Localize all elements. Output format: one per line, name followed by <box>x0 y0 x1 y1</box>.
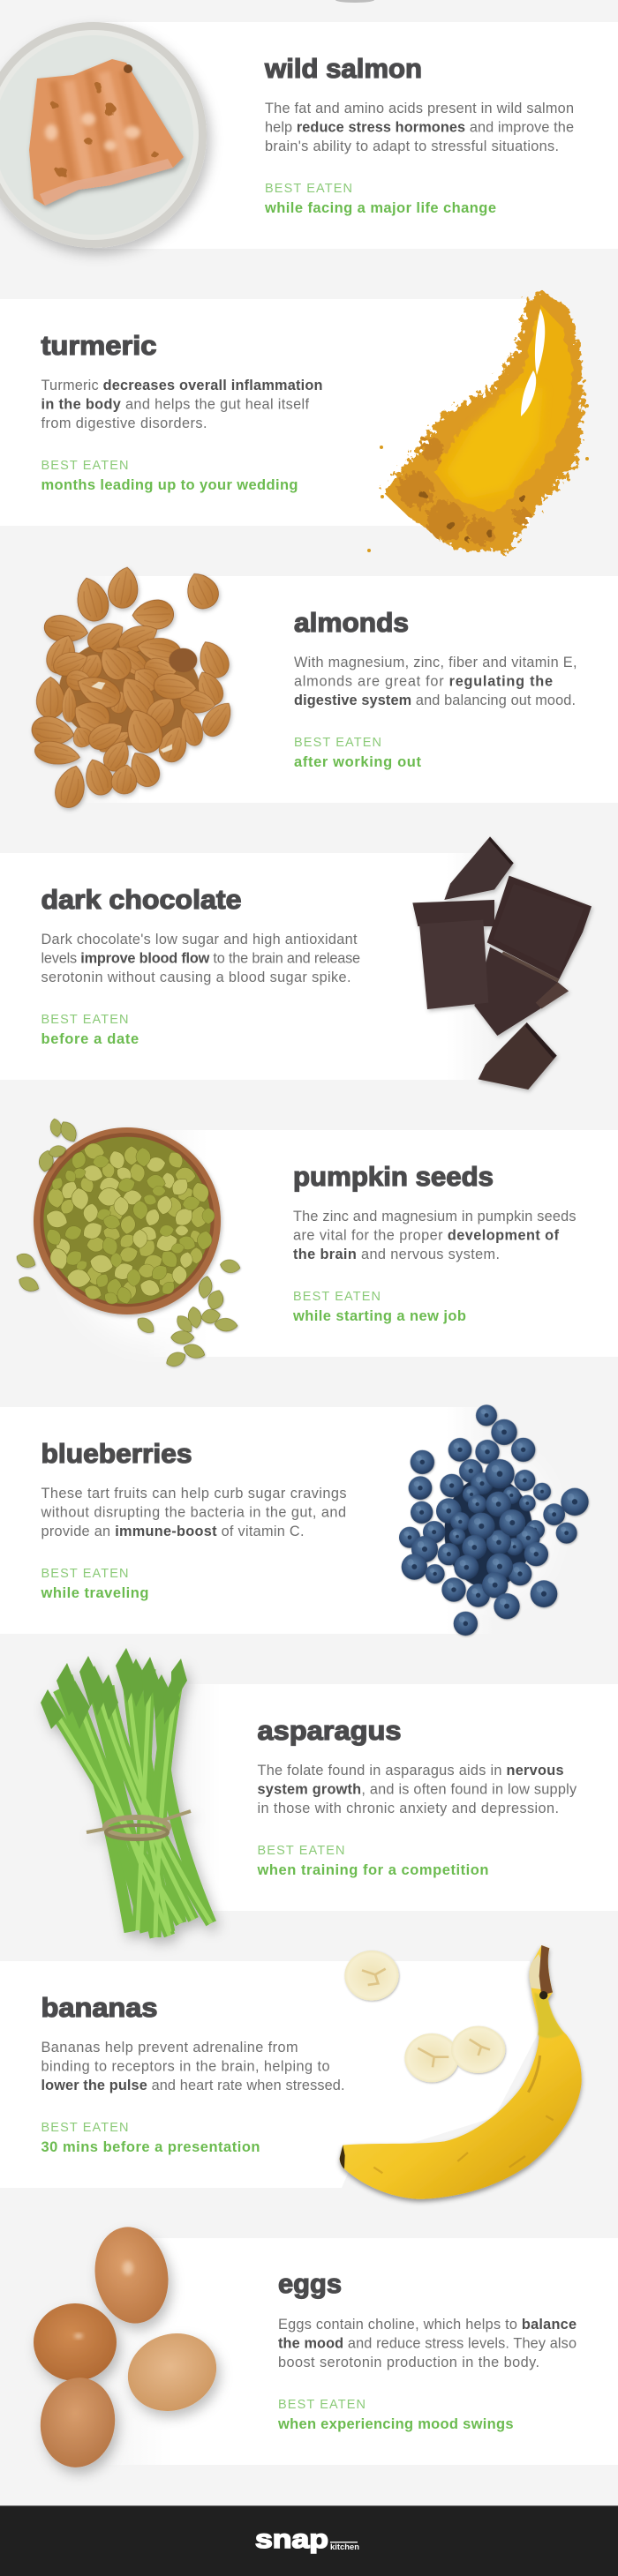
banana body <box>340 1945 582 2199</box>
pumpkin seeds card <box>146 1130 618 1357</box>
dark chocolate text <box>41 884 360 1047</box>
panel: dark chocolate <box>0 836 592 1090</box>
body text: without disrupting the bacteria in the gut, and <box>41 1505 346 1521</box>
body text: are vital for the proper development of <box>293 1228 560 1244</box>
best eaten occasion: after working out <box>294 754 422 770</box>
blueberries text <box>41 1438 346 1601</box>
best eaten label: BEST EATEN <box>294 736 381 750</box>
panel: blueberries <box>0 1404 589 1636</box>
image: blueberries <box>399 1404 589 1636</box>
panel: wild salmon <box>0 22 618 249</box>
body text <box>41 1486 346 1539</box>
body text: in those with chronic anxiety and depression. <box>258 1801 559 1816</box>
heading: eggs <box>278 2268 342 2299</box>
best eaten occasion: when experiencing mood swings <box>277 2416 514 2432</box>
panel: asparagus <box>41 1648 618 1937</box>
twine <box>87 1811 191 1839</box>
wild salmon card <box>93 22 618 249</box>
image: salmon on plate <box>0 22 207 248</box>
body text: levels improve blood flow to the brain and release <box>41 951 360 967</box>
body text: The folate found in asparagus aids in nervous <box>258 1763 563 1778</box>
image: almonds <box>29 565 238 811</box>
heading: turmeric <box>41 330 157 361</box>
heading: pumpkin seeds <box>293 1161 494 1192</box>
panel: turmeric <box>0 289 589 552</box>
body text: brain's ability to adapt to stressful situations. <box>265 139 559 154</box>
body text <box>41 378 323 431</box>
turmeric text <box>41 330 323 493</box>
best eaten occasion: before a date <box>41 1031 139 1047</box>
body text <box>293 1209 576 1262</box>
body text: almonds are great for regulating the <box>294 674 553 690</box>
body text: boost serotonin production in the body. <box>278 2355 539 2370</box>
best eaten label: BEST EATEN <box>265 182 352 196</box>
best eaten occasion: 30 mins before a presentation <box>41 2139 260 2155</box>
pumpkin seeds text <box>292 1161 576 1324</box>
body text: system growth, and is often found in low supply <box>258 1782 577 1798</box>
body text: Turmeric decreases overall inflammation <box>41 378 323 393</box>
image: dark chocolate <box>412 836 592 1090</box>
blueberries card <box>0 1407 494 1634</box>
body text: serotonin without causing a blood sugar spike. <box>41 970 351 985</box>
bananas card <box>0 1961 540 2188</box>
panel: eggs <box>34 2221 618 2472</box>
heading: dark chocolate <box>41 884 242 915</box>
body text: help reduce stress hormones and improve the <box>265 120 574 136</box>
logo: snap kitchen: kitchen <box>330 2542 359 2552</box>
body text: Bananas help prevent adrenaline from <box>41 2040 298 2056</box>
body text: The zinc and magnesium in pumpkin seeds <box>293 1209 576 1224</box>
body text: With magnesium, zinc, fiber and vitamin E, <box>294 655 577 670</box>
body text: from digestive disorders. <box>41 416 207 431</box>
body text <box>278 2317 577 2370</box>
body text: binding to receptors in the brain, helping to <box>41 2059 330 2075</box>
body text: Dark chocolate's low sugar and high antioxidant <box>41 932 358 947</box>
footer bar <box>0 2505 618 2576</box>
body text: The fat and amino acids present in wild salmon <box>265 101 574 116</box>
body text: in the body and helps the gut heal itself <box>41 397 309 413</box>
body text: the brain and nervous system. <box>293 1247 500 1262</box>
dark chocolate card <box>0 853 494 1080</box>
eggs card <box>97 2238 618 2465</box>
best eaten occasion: while facing a major life change <box>264 200 496 216</box>
panel: almonds <box>29 565 618 811</box>
banana slices <box>344 1951 505 2082</box>
best eaten occasion: while starting a new job <box>292 1308 466 1324</box>
image: asparagus bundle <box>41 1648 211 1937</box>
body text: the mood and reduce stress levels. They also <box>278 2336 577 2352</box>
body text: digestive system and balancing out mood. <box>294 693 576 708</box>
heading: asparagus <box>258 1715 401 1746</box>
body text <box>258 1763 577 1816</box>
almonds text <box>294 607 577 770</box>
best eaten label: BEST EATEN <box>293 1290 381 1304</box>
best eaten label: BEST EATEN <box>278 2398 366 2412</box>
wild salmon text <box>264 53 574 216</box>
panel: bananas <box>0 1945 582 2199</box>
best eaten label: BEST EATEN <box>41 459 129 473</box>
logo: snap kitchen: snap <box>255 2525 328 2554</box>
body text <box>41 932 360 985</box>
image: eggs <box>34 2221 228 2472</box>
best eaten label: BEST EATEN <box>41 1013 129 1027</box>
panel: pumpkin seeds <box>14 1118 618 1369</box>
best eaten occasion: when training for a competition <box>256 1862 489 1878</box>
best eaten label: BEST EATEN <box>258 1844 344 1858</box>
asparagus card <box>172 1684 618 1911</box>
footer <box>0 2505 618 2576</box>
eggs text <box>277 2268 577 2432</box>
heading: wild salmon <box>264 53 422 84</box>
heading: bananas <box>41 1992 157 2023</box>
best eaten occasion: months leading up to your wedding <box>41 477 298 493</box>
body text <box>265 101 574 154</box>
body text: These tart fruits can help curb sugar cravings <box>41 1486 346 1501</box>
image: bowl of pumpkin seeds <box>14 1118 241 1369</box>
best eaten label: BEST EATEN <box>41 1567 129 1581</box>
body text <box>41 2040 344 2093</box>
almonds card <box>79 576 618 803</box>
best eaten occasion: while traveling <box>41 1585 148 1601</box>
asparagus text <box>256 1715 577 1878</box>
logo: snap kitchen <box>255 2525 359 2554</box>
image: turmeric powder <box>367 289 589 552</box>
bananas text <box>41 1992 344 2155</box>
best eaten label: BEST EATEN <box>41 2121 129 2135</box>
body text: lower the pulse and heart rate when stressed. <box>41 2078 344 2093</box>
image: banana and slices <box>340 1945 582 2199</box>
heading: almonds <box>294 607 409 638</box>
body text: Eggs contain choline, which helps to balance <box>278 2317 577 2333</box>
heading: blueberries <box>41 1438 192 1469</box>
body text: provide an immune-boost of vitamin C. <box>41 1524 304 1539</box>
turmeric card <box>0 299 530 526</box>
body text <box>294 655 577 708</box>
